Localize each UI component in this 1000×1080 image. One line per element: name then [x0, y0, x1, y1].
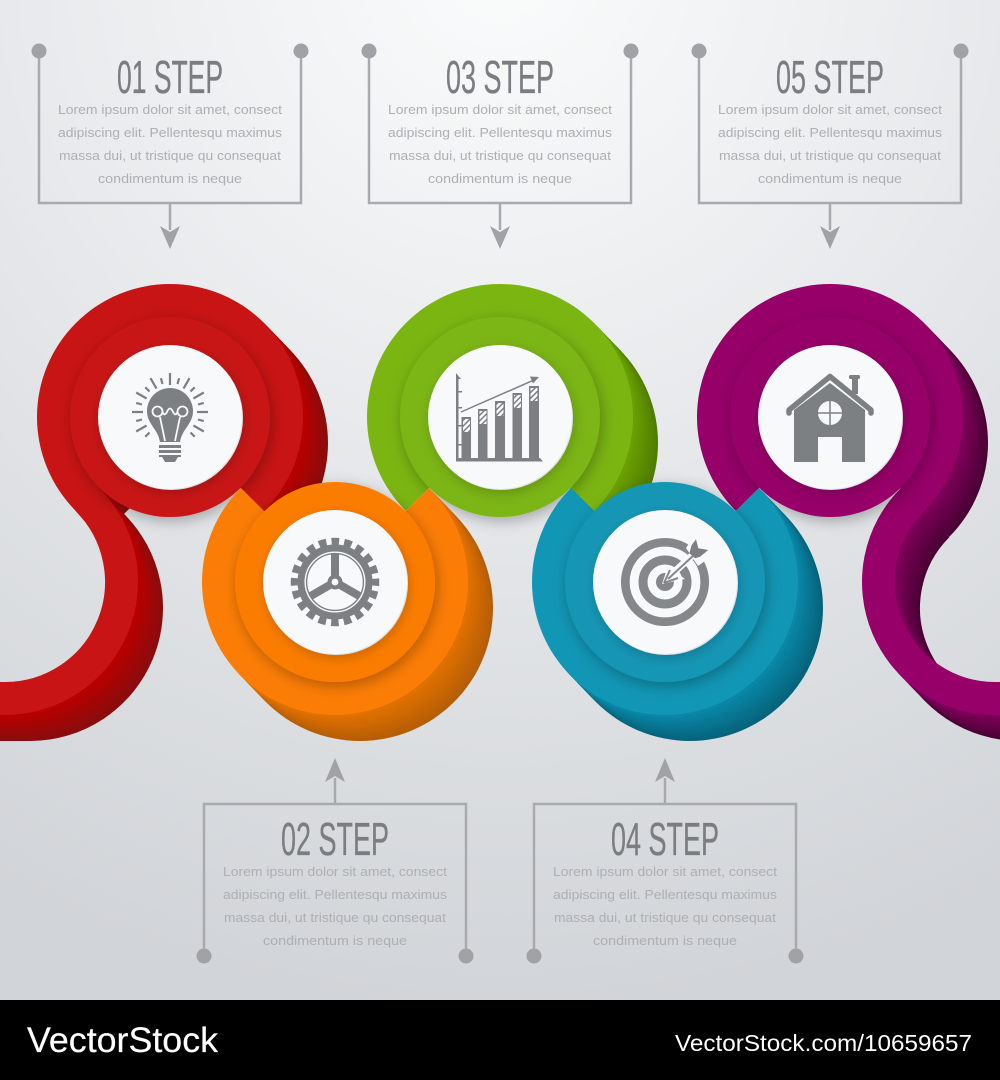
- panel: step 02 callout: [196, 758, 474, 964]
- panel: step 03 callout: condimentum is neque: [428, 171, 572, 186]
- panel: step 04 callout: condimentum is neque: [593, 933, 737, 948]
- panel: step 02 callout: massa dui, ut tristique qu consequat: [224, 910, 446, 925]
- icon: gear: [295, 542, 375, 622]
- icon: bar chart: [456, 373, 543, 462]
- panel: step 04 callout: Lorem ipsum dolor sit amet, consect: [553, 864, 777, 879]
- panel: step 05 callout: [692, 44, 968, 249]
- panel: purple ribbon circle with house: [697, 284, 1000, 724]
- panel: step 01 callout: adipiscing elit. Pellentesqu maximus: [58, 125, 283, 140]
- footer url text: VectorStock.com/10659657: [675, 1030, 972, 1056]
- panel: step 03 callout: Lorem ipsum dolor sit amet, consect: [388, 102, 612, 117]
- panel: step 05 callout: 05 STEP: [776, 51, 884, 103]
- panel: step 01 callout: Lorem ipsum dolor sit amet, consect: [58, 102, 282, 117]
- panel: step 05 callout: massa dui, ut tristique qu consequat: [719, 148, 941, 163]
- panel: step 05 callout: adipiscing elit. Pellentesqu maximus: [718, 125, 943, 140]
- footer logo text: VectorStock: [27, 1021, 219, 1060]
- panel: step 02 callout: Lorem ipsum dolor sit amet, consect: [223, 864, 447, 879]
- panel: blue ribbon circle with target: [532, 482, 823, 741]
- panel: step 01 callout: massa dui, ut tristique qu consequat: [59, 148, 281, 163]
- panel: step 04 callout: massa dui, ut tristique qu consequat: [554, 910, 776, 925]
- footer bar: [0, 1000, 1000, 1080]
- icon: house: [789, 375, 871, 462]
- panel: step 04 callout: adipiscing elit. Pellentesqu maximus: [553, 887, 778, 902]
- panel: orange ribbon circle with gear: [202, 482, 493, 741]
- panel: step 02 callout: 02 STEP: [281, 813, 389, 865]
- panel: red ribbon circle with light bulb: [0, 284, 328, 724]
- panel: step 04 callout: 04 STEP: [611, 813, 719, 865]
- panel: step 03 callout: massa dui, ut tristique qu consequat: [389, 148, 611, 163]
- panel: step 05 callout: Lorem ipsum dolor sit amet, consect: [718, 102, 942, 117]
- icon: target with arrow: [625, 536, 712, 622]
- panel: step 02 callout: condimentum is neque: [263, 933, 407, 948]
- panel: step 01 callout: condimentum is neque: [98, 171, 242, 186]
- panel: step 01 callout: 01 STEP: [117, 51, 223, 103]
- panel: step 03 callout: adipiscing elit. Pellentesqu maximus: [388, 125, 613, 140]
- panel: green ribbon circle with bar chart: [367, 284, 658, 537]
- panel: step 05 callout: condimentum is neque: [758, 171, 902, 186]
- panel: step 01 callout: [32, 44, 308, 249]
- panel: step 03 callout: 03 STEP: [446, 51, 554, 103]
- panel: step 03 callout: [362, 44, 638, 249]
- icon: light bulb: [132, 373, 208, 462]
- panel: step 02 callout: adipiscing elit. Pellentesqu maximus: [223, 887, 448, 902]
- panel: step 04 callout: [526, 758, 804, 964]
